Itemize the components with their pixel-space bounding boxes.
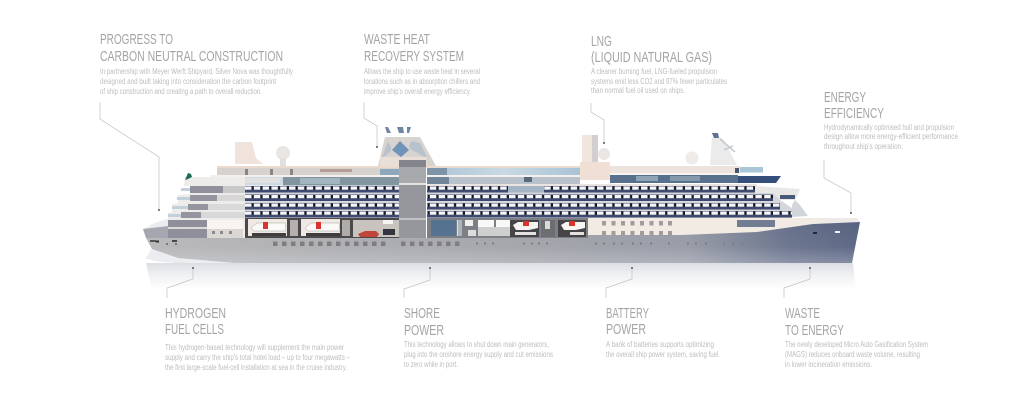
description: This technology allows to shut down main generators, [404,340,549,349]
hull and cream deck windows [273,221,743,246]
heading [824,89,884,122]
description: of ship construction and creating a path to overall reduction. [100,87,262,96]
description: Allows the ship to use waste heat in several [364,67,480,76]
heading: POWER [404,322,444,339]
description [824,123,958,151]
heading [785,305,844,339]
description [785,340,928,369]
heading: CARBON NEUTRAL CONSTRUCTION [100,48,283,65]
stern terraces [143,177,245,238]
description [404,340,553,369]
description: (MAGS) reduces onboard waste volume, resulting [785,350,920,359]
heading: EFFICIENCY [824,105,884,122]
lifeboat 4 [558,220,586,237]
leader line [364,102,378,148]
callout: LNG [591,33,727,144]
LNG funnel [580,135,610,180]
icon: green flag at stern [185,173,192,180]
heading: BATTERY [606,305,649,322]
leader line [784,267,811,298]
heading [606,305,649,338]
description [591,67,727,95]
description [165,343,350,372]
callout: hydrogen fuel cells [165,267,350,372]
leader line [591,103,605,144]
mast funnel aft [235,142,263,164]
heading: WASTE [785,305,820,322]
description [100,67,293,96]
ship cross-section illustration [143,127,860,290]
description: designed and built taking into consideration the carbon footprint [100,77,277,86]
description [606,340,720,359]
description: in lower incineration emissions. [785,360,872,369]
heading: ENERGY [824,89,866,106]
description: A cleaner burning fuel, LNG-fueled propulsion [591,67,717,76]
leader line [167,267,194,298]
leader line [824,160,852,214]
callout: waste heat recovery [364,31,480,148]
lifeboat 1 [251,222,286,236]
description [364,67,480,96]
description: This hydrogen-based technology will supplement the main power [165,343,344,352]
heading: LNG [591,33,612,50]
bow deck [820,218,860,222]
central tower [399,160,426,238]
heading: SHORE [404,305,440,322]
callout: carbon neutral construction [100,31,293,211]
service deck [245,218,588,238]
heading: (LIQUID NATURAL GAS) [591,49,712,66]
callout: energy efficiency [824,89,958,214]
heading [364,31,464,65]
mast forward [710,133,737,165]
description: supply and carry the ship's total hotel load – up to four megawatts – [165,353,350,362]
description: systems emit less CO2 and 97% fewer particulates [591,77,727,86]
description: Hydrodynamically optimised hull and propulsion [824,123,954,132]
radar dome aft [276,146,290,166]
heading [591,33,712,66]
heading: PROGRESS TO [100,31,173,48]
description: plug into the onshore energy supply and cut emissions [404,350,553,359]
description: the overall ship power system, saving fuel. [606,350,720,359]
description: The newly developed Micro Auto Gasification System [785,340,928,349]
description: A bank of batteries supports optimizing [606,340,714,349]
heading [165,305,226,338]
lifeboat 3 [510,220,539,237]
heading: WASTE HEAT [364,31,430,48]
forward bridge wing [755,186,808,217]
forward superstructure [588,218,860,235]
description: In partnership with Meyer Werft Shipyard, Silver Nova was thoughtfully [100,67,293,76]
cabin rows [245,186,792,218]
leader line [606,267,633,298]
heading: HYDROGEN [165,305,226,322]
callout: shore power [404,267,553,369]
callout: battery power [606,267,720,359]
top decks [185,166,781,186]
heading: FUEL CELLS [165,321,224,338]
description: locations such as in absorption chillers and [364,77,480,86]
heading: POWER [606,321,646,338]
description: than normal fuel oil used on ships. [591,86,685,95]
description: the first large-scale fuel-cell installation at sea in the cruise industry. [165,363,347,372]
heading: TO ENERGY [785,322,844,339]
main funnel with logo [378,127,436,167]
lifeboat 2 [305,222,340,236]
heading [100,31,283,65]
hull [146,222,860,263]
leader line [404,267,431,298]
description: throughout ship's operation. [824,142,903,151]
description: to zero while in port. [404,360,458,369]
water reflection [146,263,856,290]
leader line [100,102,160,211]
tender boat [358,231,379,237]
description: improve ship's overall energy efficiency. [364,87,471,96]
heading [404,305,444,339]
heading: RECOVERY SYSTEM [364,48,464,65]
description: design allow more energy-efficient performance [824,132,958,141]
callout: waste to energy [784,267,928,369]
radar dome forward [686,152,698,164]
